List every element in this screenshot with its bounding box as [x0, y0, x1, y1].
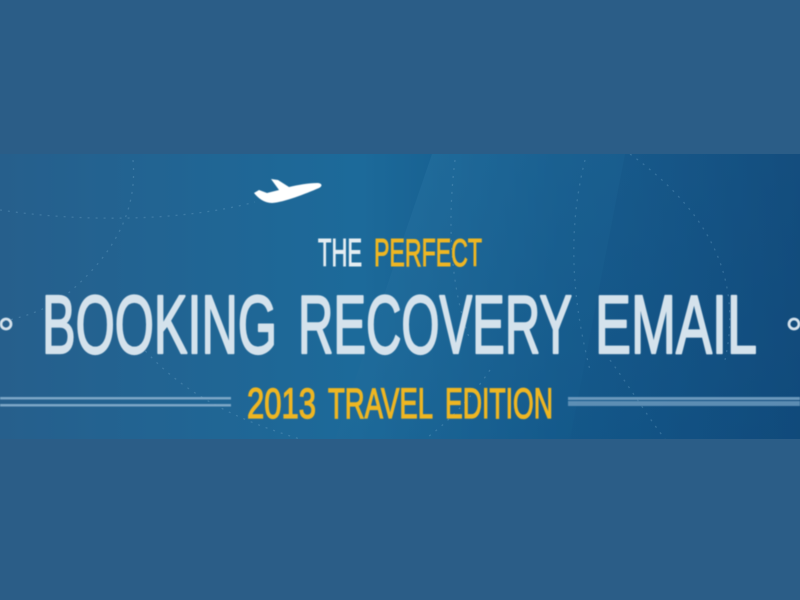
subtitle: 2013 travel edition: 2013 — [247, 380, 316, 428]
infographic header — [0, 154, 800, 439]
left route marker — [1, 319, 11, 329]
subtitle: 2013 travel edition: TRAVEL — [328, 380, 433, 428]
title: booking recovery email: BOOKING — [42, 278, 277, 371]
title: booking recovery email — [42, 278, 757, 371]
icon: airplane — [254, 179, 321, 203]
heading: the perfect: THE — [318, 232, 362, 275]
heading: the perfect: PERFECT — [374, 232, 482, 275]
subtitle: 2013 travel edition — [247, 380, 553, 428]
panel: banner — [0, 154, 800, 439]
right route marker — [789, 319, 799, 329]
right double line — [568, 397, 800, 406]
subtitle: 2013 travel edition: EDITION — [445, 380, 553, 428]
title: booking recovery email: RECOVERY — [298, 278, 572, 371]
left double line — [0, 397, 231, 406]
heading: the perfect — [318, 232, 482, 275]
